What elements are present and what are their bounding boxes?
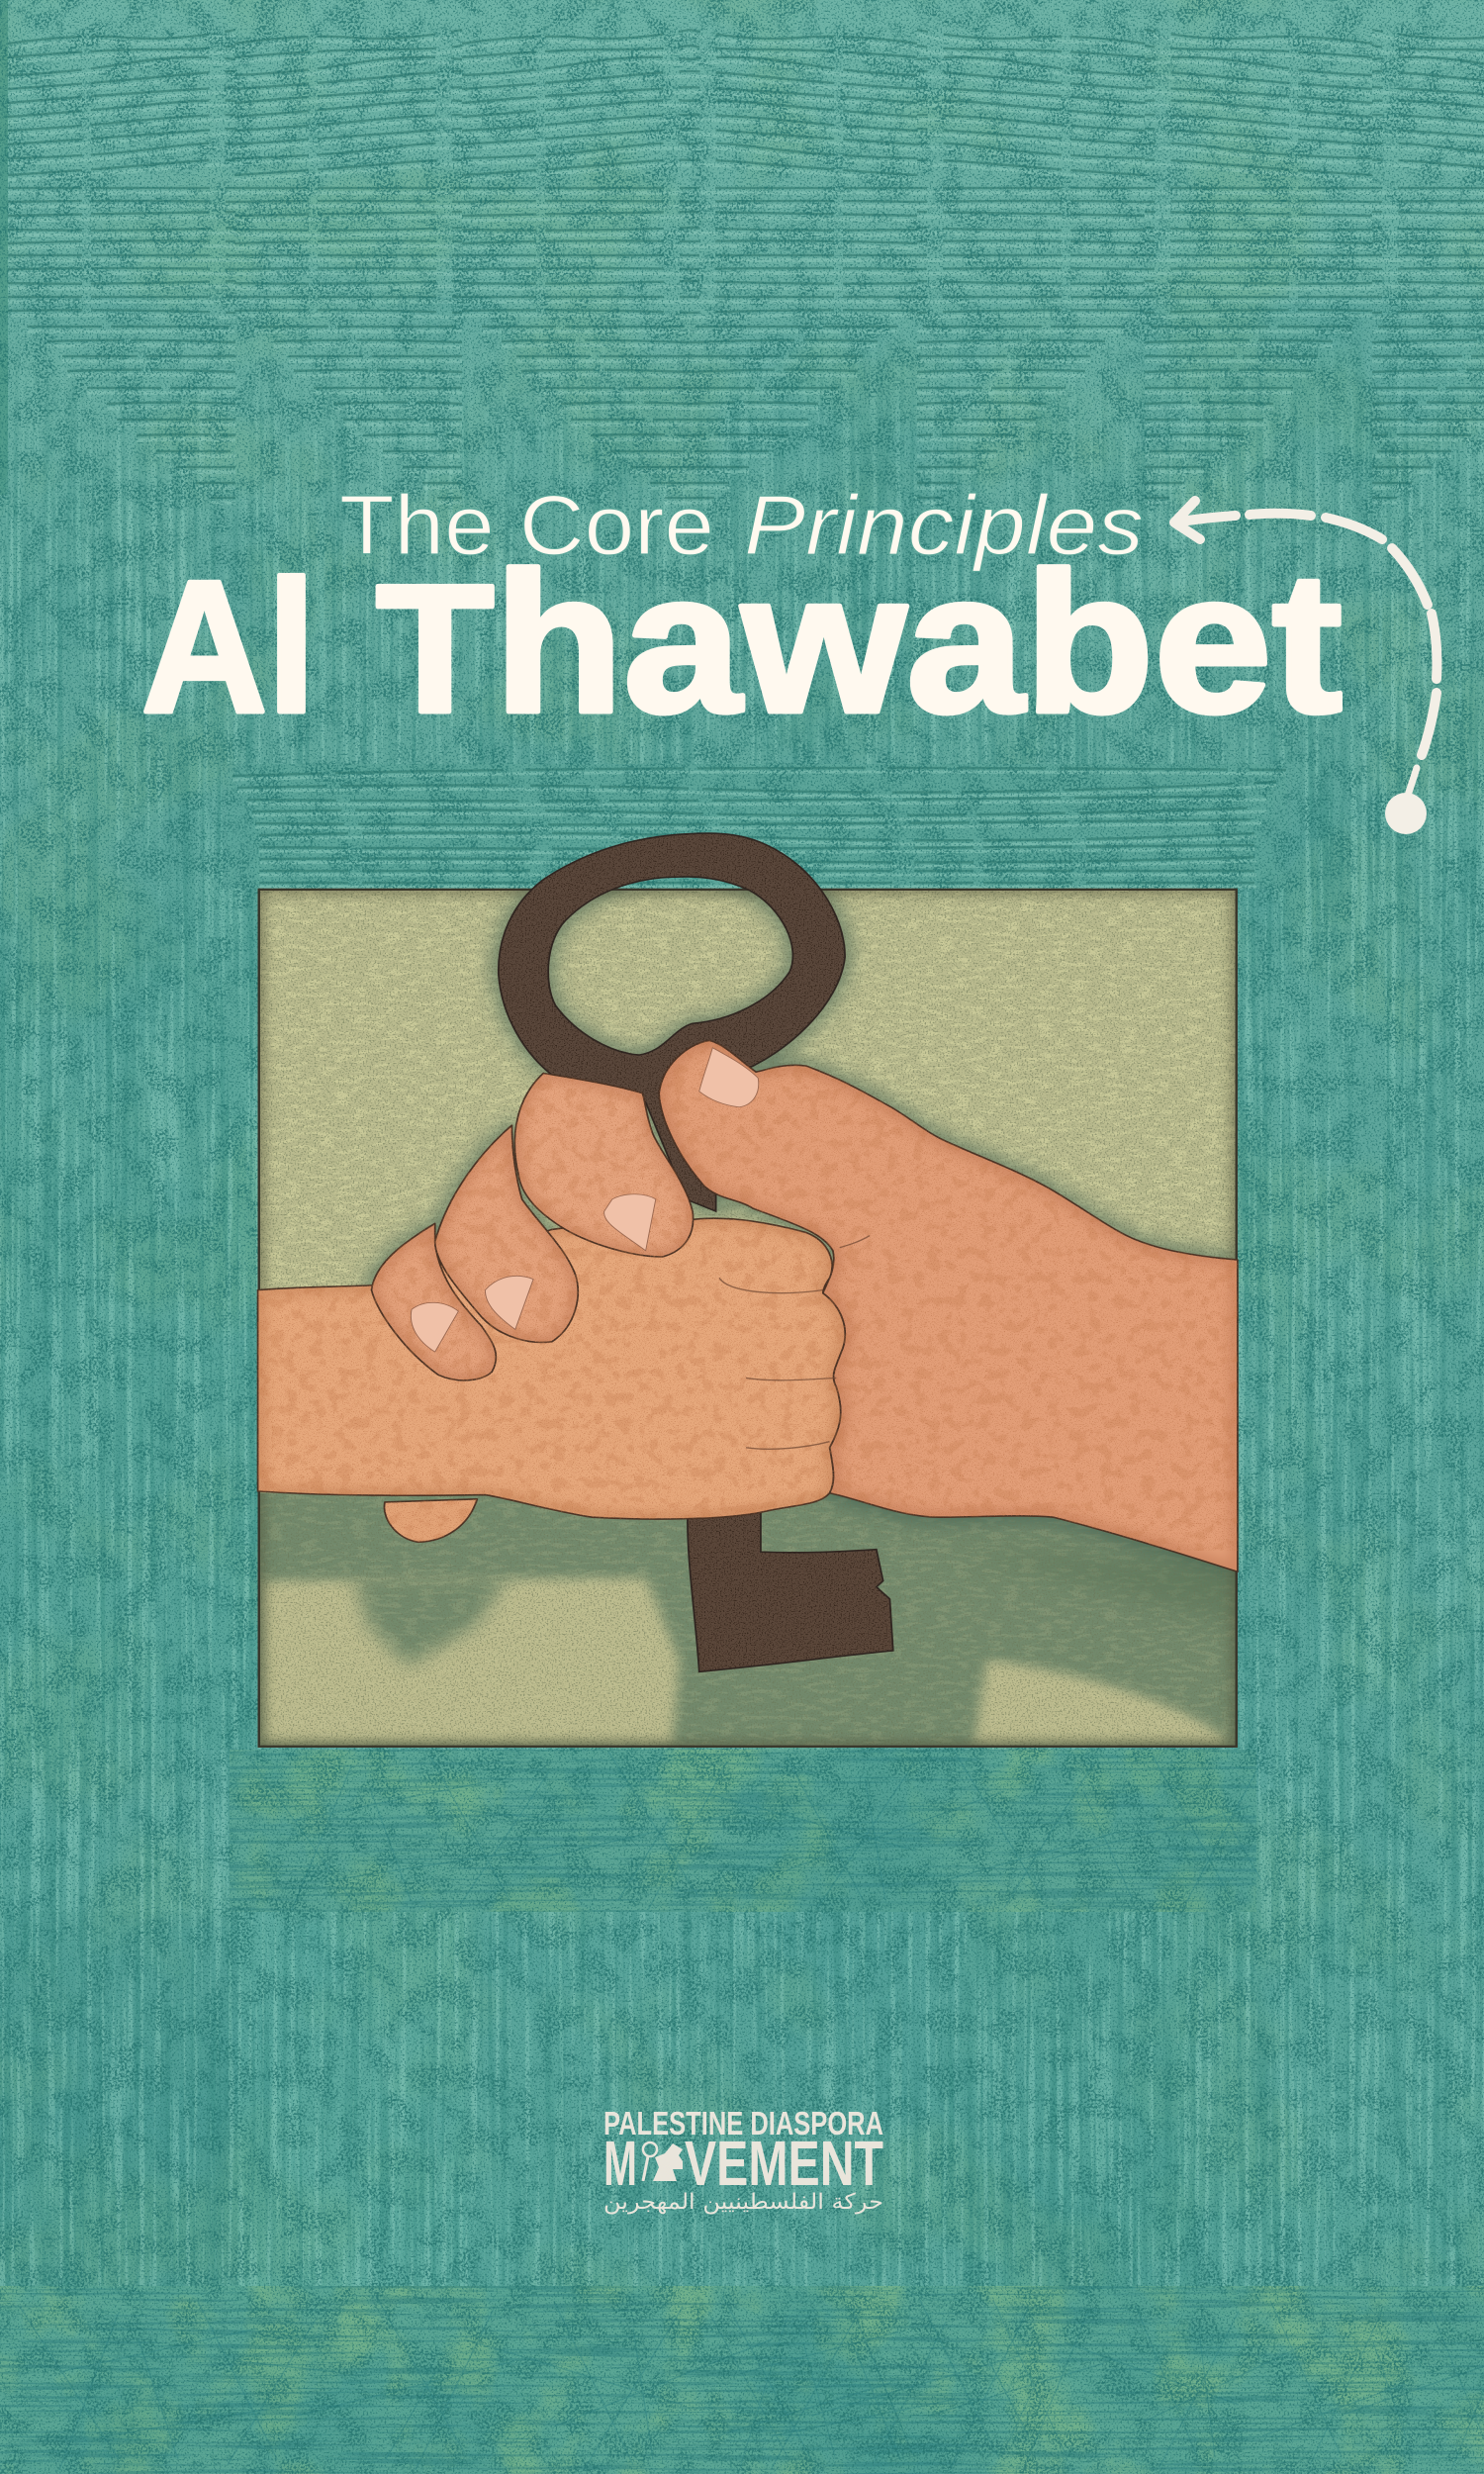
logo: Palestine Diaspora Movement [603, 2105, 883, 2215]
heading: The Core Principles: Principles [744, 479, 1144, 573]
fingernails [411, 1048, 759, 1352]
adult and child hands [258, 1036, 1238, 1571]
logo: Palestine Diaspora Movement: حركة الفلسطينيين المهجرين [603, 2190, 883, 2215]
icon: figure with key ring [643, 2142, 683, 2181]
arrow: dashed curved arrow from dot to heading [1174, 501, 1437, 834]
logo: Palestine Diaspora Movement: VEMENT [685, 2128, 883, 2199]
logo: Palestine Diaspora Movement: PALESTINE DIASPORA [603, 2105, 883, 2141]
heading: The Core Principles [339, 479, 1144, 573]
illustration: hands holding key [258, 823, 1238, 1748]
key [485, 823, 913, 1684]
illustration background panel [258, 833, 1238, 1748]
title: Al Thawabet: Thawabet [376, 530, 1343, 754]
logo: Palestine Diaspora Movement: M [603, 2128, 637, 2199]
title: Al Thawabet: Al [141, 542, 316, 752]
heading: The Core Principles: The Core [339, 479, 714, 573]
